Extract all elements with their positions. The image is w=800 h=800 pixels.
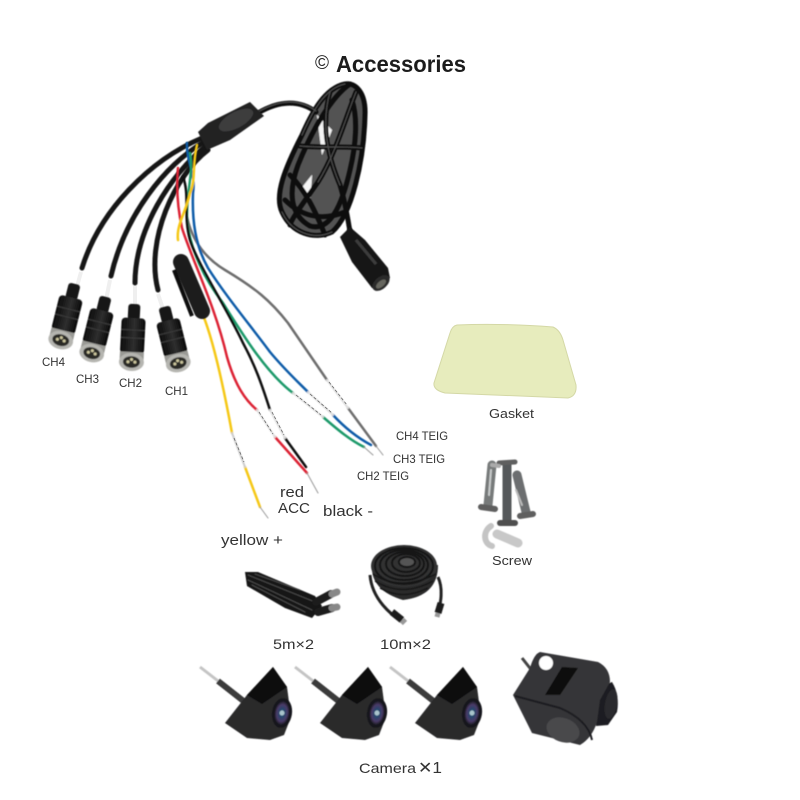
wire function labels: red [280, 484, 304, 501]
camera 4: square body [513, 652, 620, 747]
wire function labels: CH4 TEIG [396, 429, 448, 443]
connector CH4 [46, 281, 87, 352]
screw label: Screw [492, 553, 533, 568]
5m label: 5m×2 [273, 636, 314, 652]
connector CH3 [77, 294, 118, 365]
wire function labels: ACC [278, 500, 310, 517]
colored wires [177, 143, 383, 518]
inline fuse holder [174, 262, 202, 316]
camera 1 [200, 667, 294, 740]
10m cable [370, 545, 441, 623]
blue wire [187, 143, 371, 445]
wire function labels: CH3 TEIG [393, 452, 445, 466]
channel labels: CH2 [119, 376, 142, 390]
camera label: Camera [359, 760, 416, 776]
camera label: ✕1 [418, 760, 442, 777]
camera 3 [390, 667, 484, 740]
green wire [187, 153, 373, 455]
5m cable [245, 572, 337, 618]
gray wire [187, 217, 383, 455]
black wire [183, 177, 306, 467]
four channel cables [82, 138, 208, 290]
connector CH1 [152, 304, 193, 375]
channel labels [42, 355, 188, 398]
10m label: 10m×2 [380, 636, 431, 652]
channel labels: CH3 [76, 372, 99, 386]
camera 2 [295, 667, 389, 740]
gasket [434, 324, 576, 398]
wire labels: CH2, CH3, CH4 and power [234, 382, 347, 462]
main cable female connector [340, 227, 393, 294]
camera label [359, 760, 442, 777]
wire function labels: CH2 TEIG [357, 469, 409, 483]
title: © [315, 53, 329, 74]
splitter housing [198, 102, 264, 150]
yellow wire [178, 145, 268, 518]
cable labels [76, 272, 164, 312]
screws [481, 462, 533, 546]
channel labels: CH1 [165, 384, 188, 398]
wire function labels: yellow + [221, 532, 283, 549]
red wire [177, 168, 318, 493]
title: Accessories [336, 51, 466, 77]
gasket label: Gasket [489, 406, 534, 421]
wire function labels: black - [323, 503, 373, 520]
main cable coil [258, 84, 365, 235]
wire function labels [221, 429, 448, 549]
connector CH2 [118, 303, 147, 372]
channel labels: CH4 [42, 355, 65, 369]
